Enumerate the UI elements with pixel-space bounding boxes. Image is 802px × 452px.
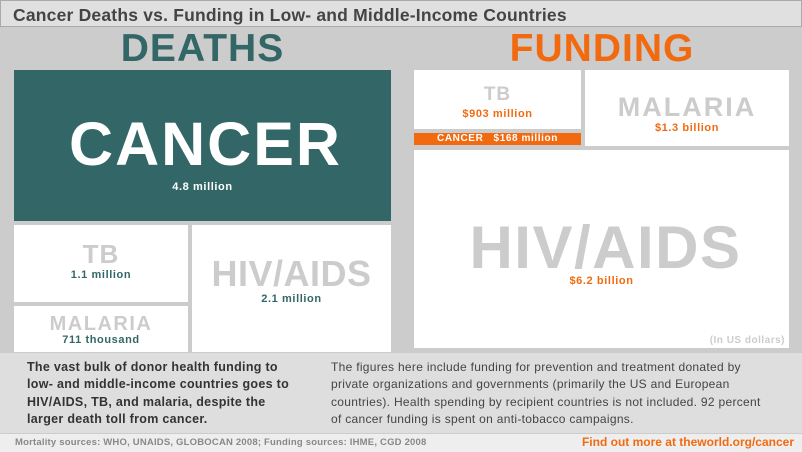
footer <box>0 433 802 452</box>
panel: HIV deaths: 2.1 million <box>261 293 322 305</box>
panel: TB funding: TB <box>484 84 511 105</box>
title bar <box>0 0 802 27</box>
panel: TB deaths: TB <box>83 239 119 269</box>
panel: cancer deaths: CANCER <box>69 110 342 178</box>
panel: cancer deaths <box>14 70 391 221</box>
panel: malaria funding <box>585 70 789 146</box>
text block: summary: larger death toll from cancer. <box>27 412 208 426</box>
panel: malaria deaths <box>14 306 188 352</box>
heading: deaths: DEATHS <box>121 27 284 70</box>
heading: funding: FUNDING <box>510 27 694 70</box>
text block: details: of cancer funding is spent on anti-tobacco campaigns. <box>331 412 634 426</box>
text block: details: The figures here include funding for prevention and treatment donated by <box>331 360 741 374</box>
title bar: Cancer Deaths vs. Funding in Low- and Middle-Income Countries <box>13 5 567 25</box>
panel: malaria funding: MALARIA <box>618 92 756 122</box>
panel: cancer funding bar: CANCER $168 million <box>437 133 558 144</box>
panel: cancer deaths: 4.8 million <box>172 181 233 193</box>
panel: TB deaths <box>14 225 188 302</box>
text block: summary: HIV/AIDS, TB, and malaria, despite the <box>27 395 266 409</box>
text block: summary: low- and middle-income countries goes to <box>27 377 289 391</box>
panel: HIV funding <box>414 150 789 348</box>
panel: malaria funding: $1.3 billion <box>655 122 719 134</box>
panel: TB deaths: 1.1 million <box>71 269 131 281</box>
panel: HIV deaths <box>192 225 391 352</box>
panel: TB funding: $903 million <box>462 108 533 120</box>
panel: malaria deaths: MALARIA <box>50 313 152 335</box>
panel: HIV funding: $6.2 billion <box>569 275 634 287</box>
note: currency: (In US dollars) <box>710 335 785 346</box>
panel: malaria deaths: 711 thousand <box>62 334 140 346</box>
panel: TB funding <box>414 70 581 129</box>
panel: HIV funding: HIV/AIDS <box>469 214 742 281</box>
text block: details: private organizations and governments (primarily the US and European <box>331 377 730 391</box>
text area background <box>0 353 802 433</box>
panel: HIV deaths: HIV/AIDS <box>211 253 372 294</box>
text block: details: countries). Health spending by recipient countries is not included. 92 percent <box>331 395 761 409</box>
text block: details <box>331 360 761 426</box>
panel: cancer funding bar <box>414 133 581 145</box>
footer: link: Find out more at theworld.org/cancer <box>582 435 794 449</box>
text block: summary: The vast bulk of donor health funding to <box>27 360 278 374</box>
footer: sources: Mortality sources: WHO, UNAIDS, GLOBOCAN 2008; Funding sources: IHME, CGD 2008 <box>15 437 426 448</box>
text block: summary <box>27 360 289 426</box>
